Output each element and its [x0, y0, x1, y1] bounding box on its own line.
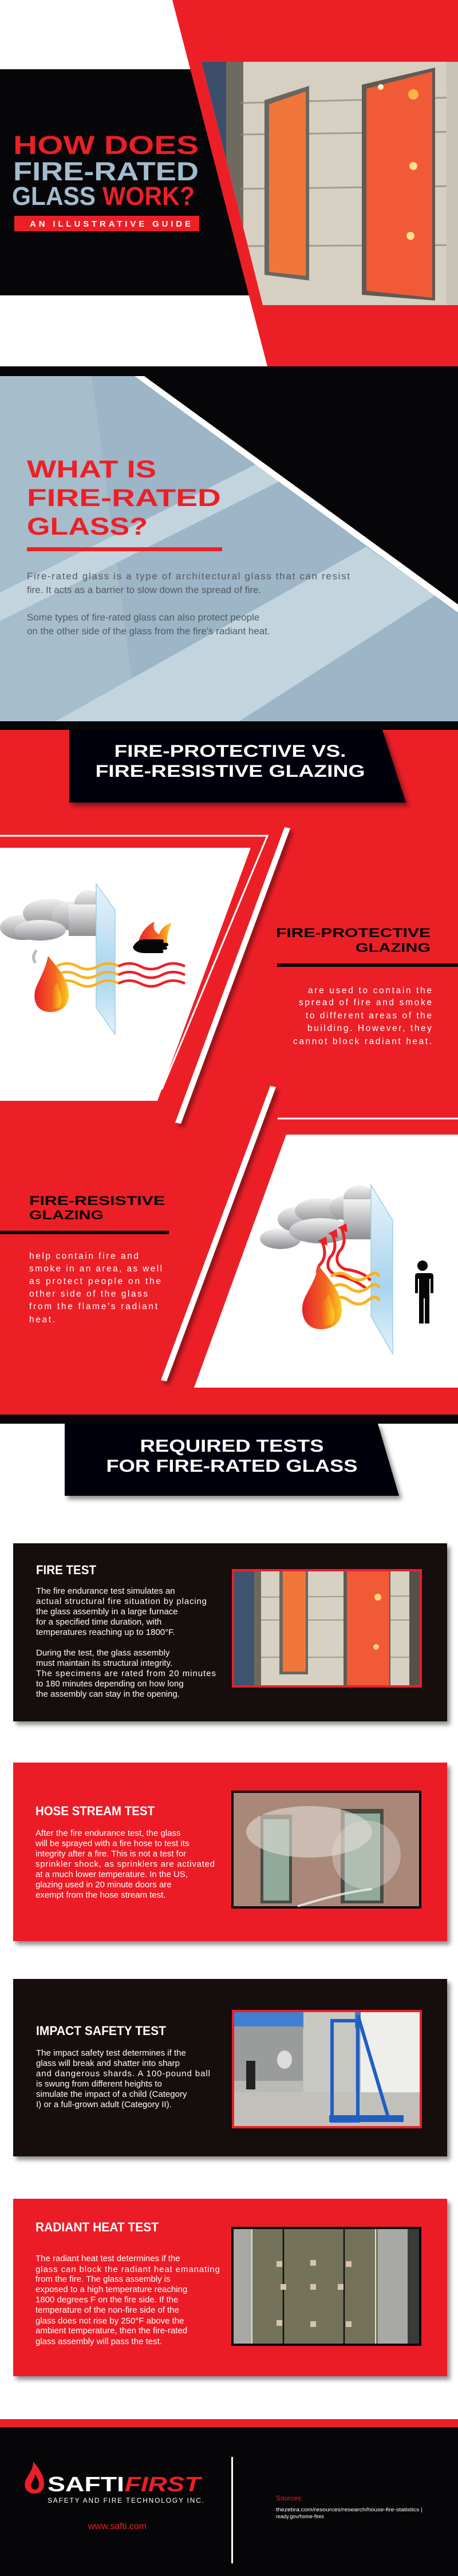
icon: smoke cloud — [260, 1186, 377, 1249]
text: fire-resistive glazing: GLAZING — [29, 1208, 104, 1222]
definition text: Fire-rated glass is a type of architectural glass that can resist — [27, 571, 350, 582]
sources — [276, 2494, 423, 2519]
text: fire-resistive glazing: help contain fire and — [29, 1251, 139, 1261]
icon: fire — [33, 950, 69, 1012]
text: fire-protective glazing: are used to contain the — [308, 986, 432, 995]
text: fire-protective glazing: FIRE-PROTECTIVE — [276, 926, 431, 940]
panel: impact safety test: IMPACT SAFETY TEST — [36, 2024, 167, 2038]
panel: impact safety test: I) or a full-grown adult (Category II). — [36, 2100, 172, 2109]
panel: hose stream test: After the fire endurance test, the glass — [35, 1828, 180, 1838]
definition text — [27, 571, 350, 637]
footer — [0, 2419, 458, 2576]
panel: fire test — [13, 1543, 447, 1721]
sources: thezebra.com/resources/research/house-fire-statistics | — [276, 2507, 423, 2512]
panel: radiant heat test: from the fire. The glass assembly is — [35, 2274, 171, 2284]
panel: hose stream test: HOSE STREAM TEST — [35, 1804, 155, 1818]
logo: saftifirst: SAFTI — [48, 2472, 124, 2496]
photo: radiant heat — [231, 2227, 421, 2346]
heading: what is fire-rated glass — [27, 456, 221, 540]
sources: ready.gov/home-fires — [276, 2514, 324, 2519]
panel: radiant heat test: 1800 degrees F on the fire side. If the — [35, 2295, 178, 2305]
heading: what is fire-rated glass: FIRE-RATED — [27, 484, 221, 512]
panel: impact safety test: simulate the impact of a child (Category — [36, 2089, 187, 2099]
panel: radiant heat test: The radiant heat test determines if the — [35, 2254, 180, 2263]
icon: logo flame — [25, 2462, 44, 2494]
hero title — [12, 131, 199, 211]
panel: impact safety test: is swung from different heights to — [36, 2079, 162, 2089]
panel: radiant heat test: RADIANT HEAT TEST — [35, 2220, 159, 2234]
panel: hose stream test: will be sprayed with a fire hose to test its — [35, 1839, 189, 1848]
panel: fire-resistive illustration — [161, 1086, 458, 1388]
panel: radiant heat test: temperature of the non-fire side of the — [35, 2305, 179, 2315]
photo: impact test — [232, 2010, 422, 2128]
section: what is fire-rated glass — [0, 366, 458, 721]
panel: impact safety test — [13, 1979, 447, 2156]
text: fire-resistive glazing: other side of the glass — [29, 1289, 148, 1299]
icon: rising heat arrows — [318, 1229, 370, 1311]
hero title: HOW DOES — [13, 131, 199, 160]
text: fire-protective glazing: spread of fire and smoke — [299, 998, 432, 1008]
icon: burned hand — [133, 922, 172, 953]
definition text: Some types of fire-rated glass can also protect people — [27, 612, 259, 623]
text: fire-protective glazing: cannot block radiant heat. — [293, 1037, 432, 1046]
icon: heat waves — [57, 963, 185, 986]
panel: fire test: FIRE TEST — [36, 1563, 97, 1577]
panel: fire test: actual structural fire situation by placing — [36, 1597, 207, 1606]
panel: hose stream test: glazing used in 20 minute doors are — [35, 1880, 172, 1890]
definition text: on the other side of the glass from the fire's radiant heat. — [27, 626, 270, 637]
section: required tests — [0, 1415, 458, 2376]
hero title: GLASS — [12, 181, 96, 211]
panel: hose stream test: exempt from the hose stream test. — [35, 1890, 166, 1900]
icon: heat waves blocked — [331, 1273, 379, 1304]
text: fire-protective glazing: GLAZING — [356, 941, 431, 955]
text: fire-resistive glazing: heat. — [29, 1315, 55, 1325]
heading: what is fire-rated glass: WHAT IS — [27, 456, 156, 483]
panel: hose stream test — [13, 1763, 447, 1941]
panel: impact safety test: and dangerous shards. A 100-pound ball — [36, 2069, 210, 2079]
panel: hose stream test: integrity after a fire. This is not a test for — [35, 1849, 186, 1859]
panel: fire test: to 180 minutes depending on how long — [36, 1679, 184, 1689]
hero section — [0, 0, 458, 366]
glazing header: FIRE-RESISTIVE GLAZING — [95, 762, 365, 781]
hero title: FIRE-RATED — [13, 157, 199, 186]
panel: hose stream test: at a much lower temperature. In the US, — [35, 1870, 188, 1879]
text: fire-protective glazing: to different areas of the — [306, 1011, 432, 1021]
hero title: WORK? — [102, 181, 195, 211]
photo: fire test — [232, 1569, 422, 1688]
text: fire-protective glazing — [276, 926, 458, 1046]
text: fire-resistive glazing: from the flame's radiant — [29, 1302, 158, 1311]
icon: glass pane — [96, 884, 115, 1034]
panel: hose stream test: sprinkler shock, as sprinklers are activated — [35, 1859, 215, 1869]
panel: impact safety test: The impact safety test determines if the — [36, 2048, 186, 2058]
photo: hose stream — [231, 1791, 421, 1909]
panel: radiant heat test: exposed to a high temperature reaching — [35, 2285, 187, 2294]
website: www.safti.com — [88, 2522, 147, 2531]
logo: saftifirst: FIRST — [125, 2472, 203, 2496]
panel: fire test: During the test, the glass assembly — [36, 1648, 170, 1658]
text: fire-resistive glazing: smoke in an area, as well — [29, 1264, 162, 1274]
panel: fire-protective illustration — [0, 827, 290, 1124]
tests header — [65, 1424, 399, 1496]
logo: saftifirst: SAFETY AND FIRE TECHNOLOGY INC. — [48, 2496, 204, 2504]
heading: what is fire-rated glass: GLASS? — [27, 513, 148, 540]
panel: fire test: temperatures reaching up to 1800°F. — [36, 1627, 175, 1637]
panel: fire test: for a specified time duration, with — [36, 1617, 161, 1627]
icon: fire — [302, 1265, 342, 1329]
glazing header: FIRE-PROTECTIVE VS. — [114, 742, 346, 761]
icon: glass pane — [371, 1185, 393, 1354]
panel: fire test: The fire endurance test simulates an — [36, 1586, 175, 1596]
panel: radiant heat test: ambient temperature, then the fire-rated — [35, 2326, 187, 2336]
text: fire-resistive glazing — [0, 1194, 169, 1325]
panel: impact safety test: glass will break and shatter into sharp — [36, 2059, 180, 2068]
logo: saftifirst — [25, 2462, 204, 2504]
sources: Sources: — [276, 2494, 303, 2502]
panel: radiant heat test: glass does not rise by 250°F above the — [35, 2316, 184, 2326]
text: fire-resistive glazing: as protect people on the — [29, 1277, 161, 1286]
panel: radiant heat test — [13, 2199, 447, 2376]
hero photo — [195, 62, 458, 305]
tests header: FOR FIRE-RATED GLASS — [106, 1456, 357, 1476]
panel: fire test: the assembly can stay in the opening. — [36, 1689, 180, 1699]
glazing header — [69, 730, 406, 803]
subtitle banner: AN ILLUSTRATIVE GUIDE — [30, 219, 191, 229]
definition text: fire. It acts as a barrier to slow down the spread of fire. — [27, 584, 261, 595]
text: fire-resistive glazing: FIRE-RESISTIVE — [29, 1194, 165, 1208]
icon: person — [414, 1261, 433, 1323]
subtitle banner — [14, 216, 199, 231]
text: fire-protective glazing: building. However, they — [307, 1024, 432, 1033]
panel: fire test: The specimens are rated from 20 minutes — [36, 1669, 216, 1678]
panel: fire test: the glass assembly in a large furnace — [36, 1607, 178, 1617]
tests header: REQUIRED TESTS — [140, 1436, 324, 1456]
panel: radiant heat test: glass can block the radiant heat emanating — [35, 2265, 220, 2274]
panel: fire test: must maintain its structural integrity. — [36, 1658, 172, 1668]
panel: radiant heat test: glass assembly will pass the test. — [35, 2337, 162, 2346]
icon: smoke cloud — [0, 890, 103, 941]
section: glazing comparison — [0, 721, 458, 1415]
